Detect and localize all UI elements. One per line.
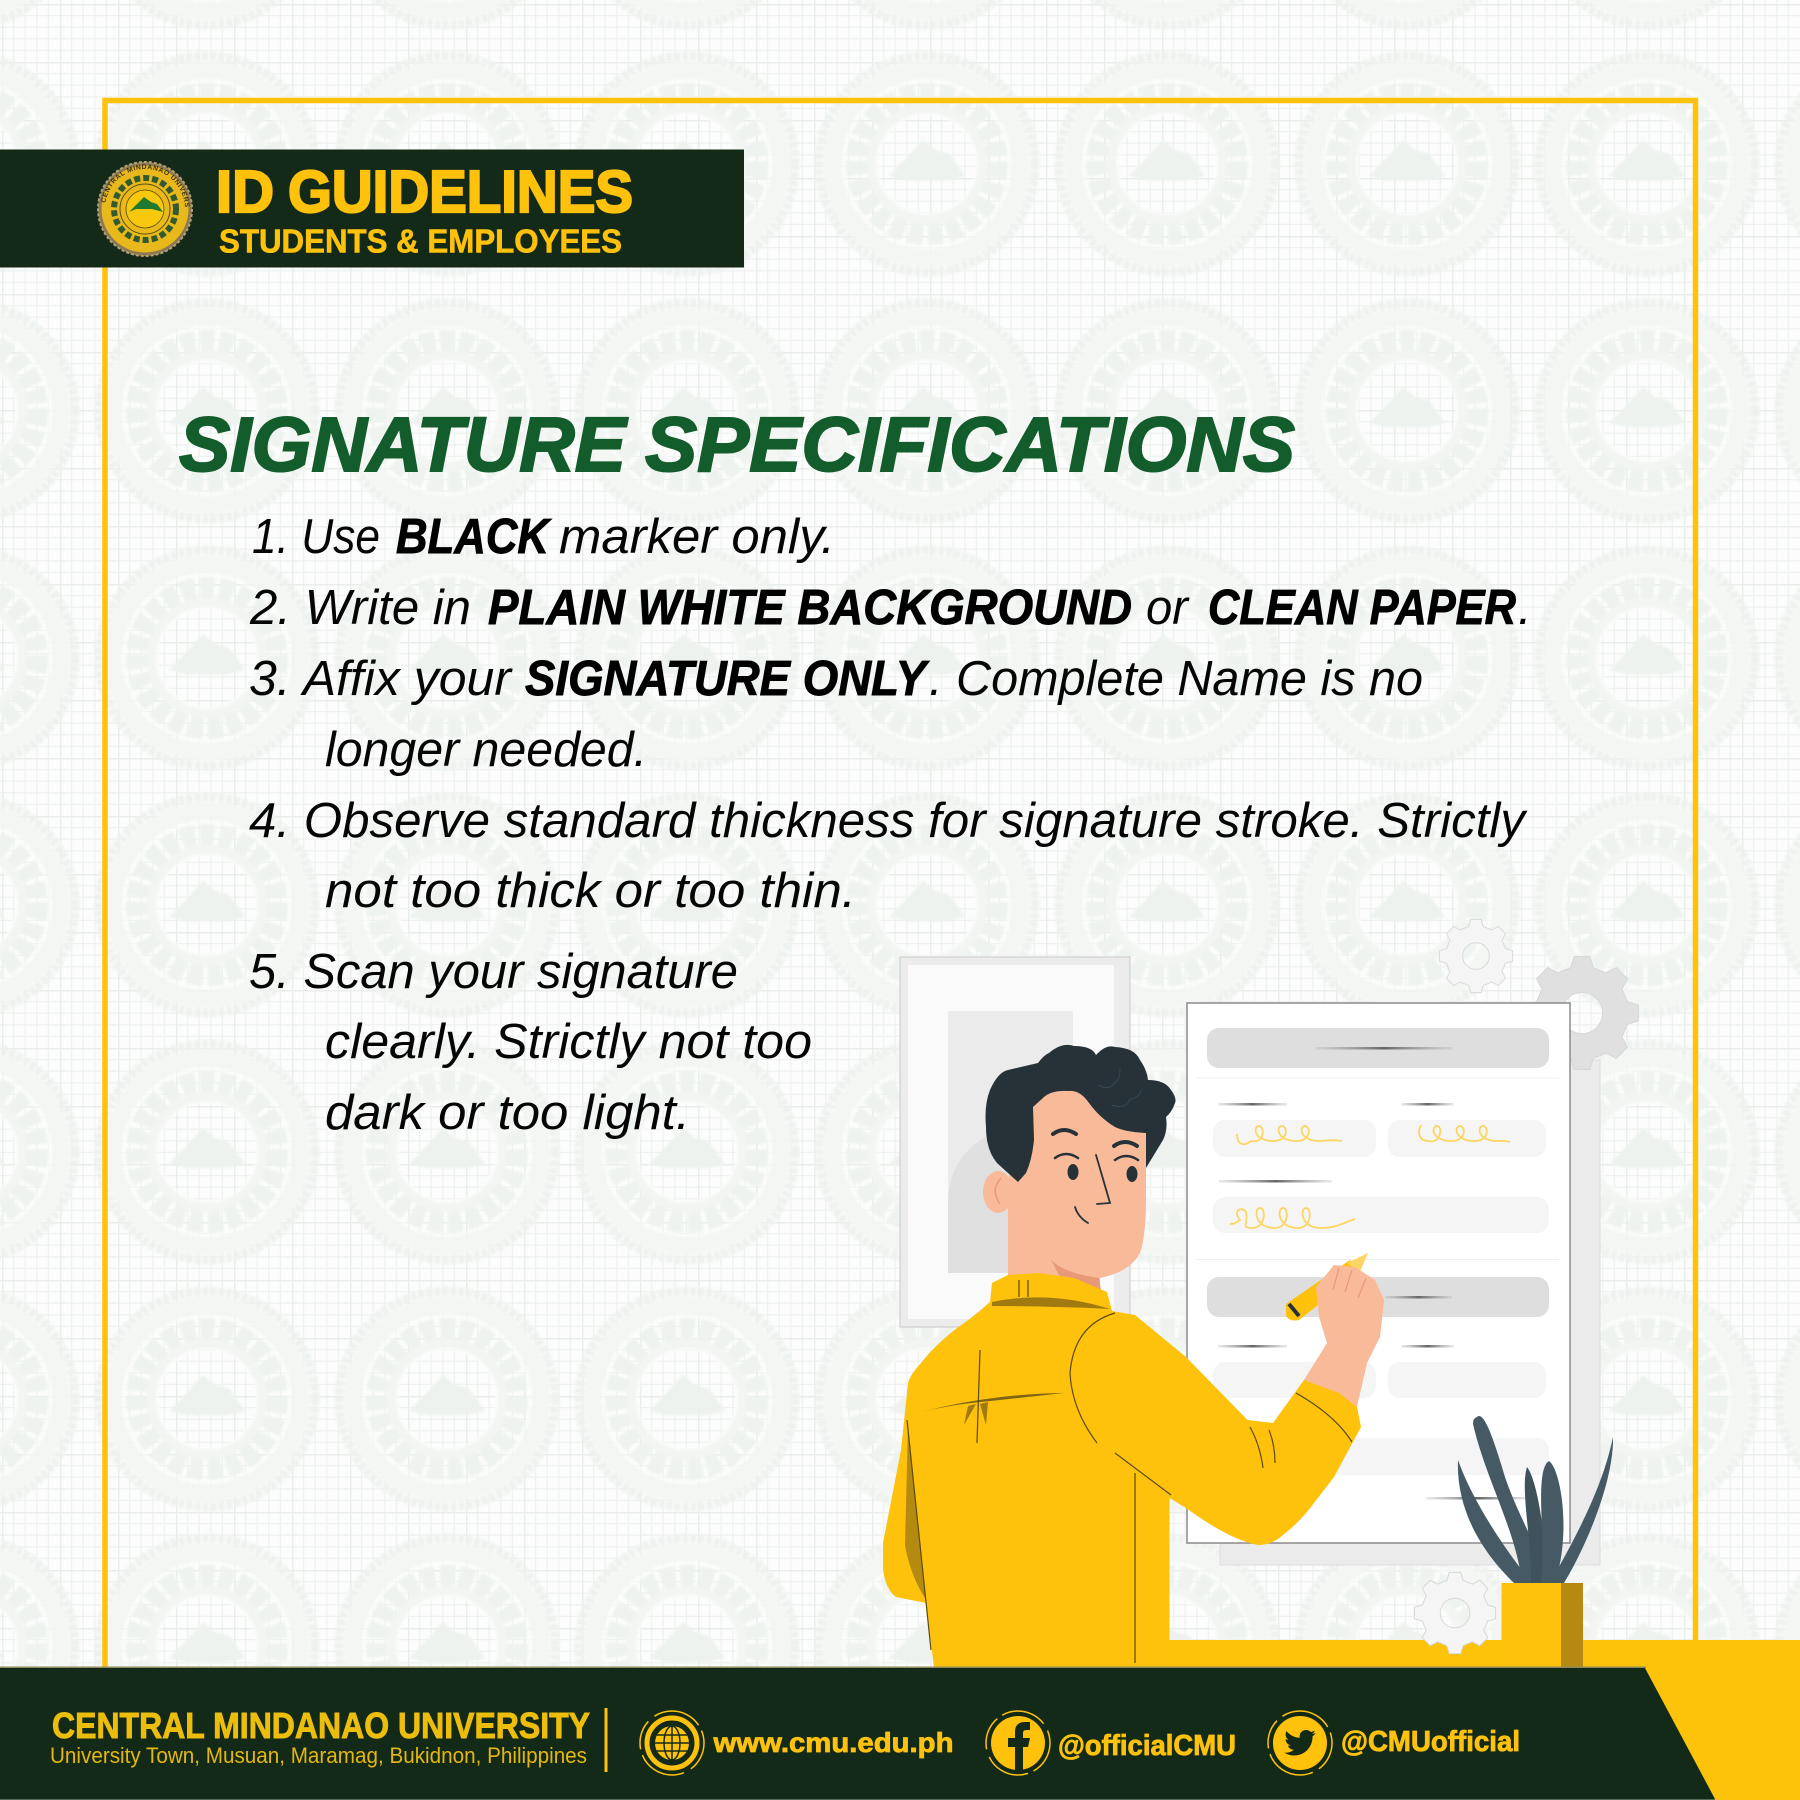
header banner bbox=[0, 150, 744, 268]
person: hand and forearm bbox=[1304, 1265, 1384, 1407]
list item 3: 3. Affix your bbox=[249, 652, 513, 706]
person: yellow shirt bbox=[883, 1273, 1361, 1667]
heading: SPECIFICATIONS bbox=[645, 402, 1295, 488]
person: facial features bbox=[1053, 1130, 1138, 1223]
form document bbox=[1187, 1003, 1570, 1543]
list item 2: CLEAN PAPER bbox=[1208, 581, 1517, 635]
heading: SIGNATURE bbox=[179, 402, 629, 488]
footer: twitter handle: @CMUofficial bbox=[1341, 1726, 1520, 1758]
icon: dark gear top right bbox=[1526, 957, 1638, 1069]
list item 4 bbox=[249, 794, 1527, 918]
icon: light gear on desk bbox=[1414, 1572, 1496, 1654]
list item 3: SIGNATURE ONLY bbox=[525, 652, 930, 706]
list item 1: 1. Use bbox=[252, 510, 380, 564]
heading bbox=[179, 402, 1295, 488]
list item 1 bbox=[252, 510, 835, 564]
list item 2: 2. Write in bbox=[249, 581, 471, 635]
list item 1: marker only. bbox=[559, 510, 835, 564]
footer band bbox=[0, 1666, 1715, 1800]
list item 1: BLACK bbox=[396, 510, 552, 564]
list item 5: dark or too light. bbox=[325, 1086, 690, 1140]
icon: globe bbox=[640, 1711, 704, 1775]
person: pencil bbox=[1286, 1253, 1368, 1320]
footer: address: University Town, Musuan, Maramag, Bukidnon, Philippines bbox=[50, 1743, 587, 1768]
list item 2: or bbox=[1146, 581, 1190, 635]
banner title: ID bbox=[216, 159, 274, 225]
list item 4: not too thick or too thin. bbox=[325, 864, 856, 918]
list item 2 bbox=[249, 581, 1532, 635]
icon: light gear top bbox=[1439, 919, 1513, 993]
footer: divider bbox=[604, 1708, 608, 1772]
list item 2: . bbox=[1518, 581, 1532, 635]
yellow page frame bbox=[105, 100, 1696, 1668]
banner title: GUIDELINES bbox=[288, 159, 633, 225]
icon: university seal bbox=[97, 161, 193, 257]
plant pot base overlay bbox=[1502, 1640, 1583, 1667]
person: neck and face bbox=[983, 1080, 1146, 1297]
list item 5: 5. Scan your signature bbox=[249, 945, 738, 999]
list item 5 bbox=[249, 945, 812, 1140]
footer: facebook handle: @officialCMU bbox=[1058, 1730, 1236, 1762]
icon: plant in yellow pot bbox=[1458, 1416, 1613, 1667]
list item 3: longer needed. bbox=[325, 723, 647, 777]
icon: twitter bbox=[1268, 1711, 1332, 1775]
footer: university name: CENTRAL MINDANAO UNIVERSITY bbox=[52, 1705, 590, 1746]
yellow desk band with footer corner bbox=[1169, 1640, 1800, 1800]
banner subtitle: STUDENTS & EMPLOYEES bbox=[219, 222, 622, 260]
icon: facebook bbox=[986, 1711, 1050, 1775]
list item 4: 4. Observe standard thickness for signature stroke. Strictly bbox=[249, 794, 1527, 848]
list item 5: clearly. Strictly not too bbox=[325, 1015, 812, 1069]
list item 3 bbox=[249, 652, 1423, 777]
picture frame on the wall bbox=[900, 957, 1130, 1327]
list item 3: . Complete Name is no bbox=[929, 652, 1423, 706]
list item 2: PLAIN WHITE BACKGROUND bbox=[488, 581, 1132, 635]
footer: website: www.cmu.edu.ph bbox=[712, 1727, 954, 1758]
person: hair bbox=[986, 1045, 1176, 1182]
back sheet of the form bbox=[1220, 1060, 1600, 1565]
illustration: person signing a form bbox=[883, 919, 1638, 1667]
